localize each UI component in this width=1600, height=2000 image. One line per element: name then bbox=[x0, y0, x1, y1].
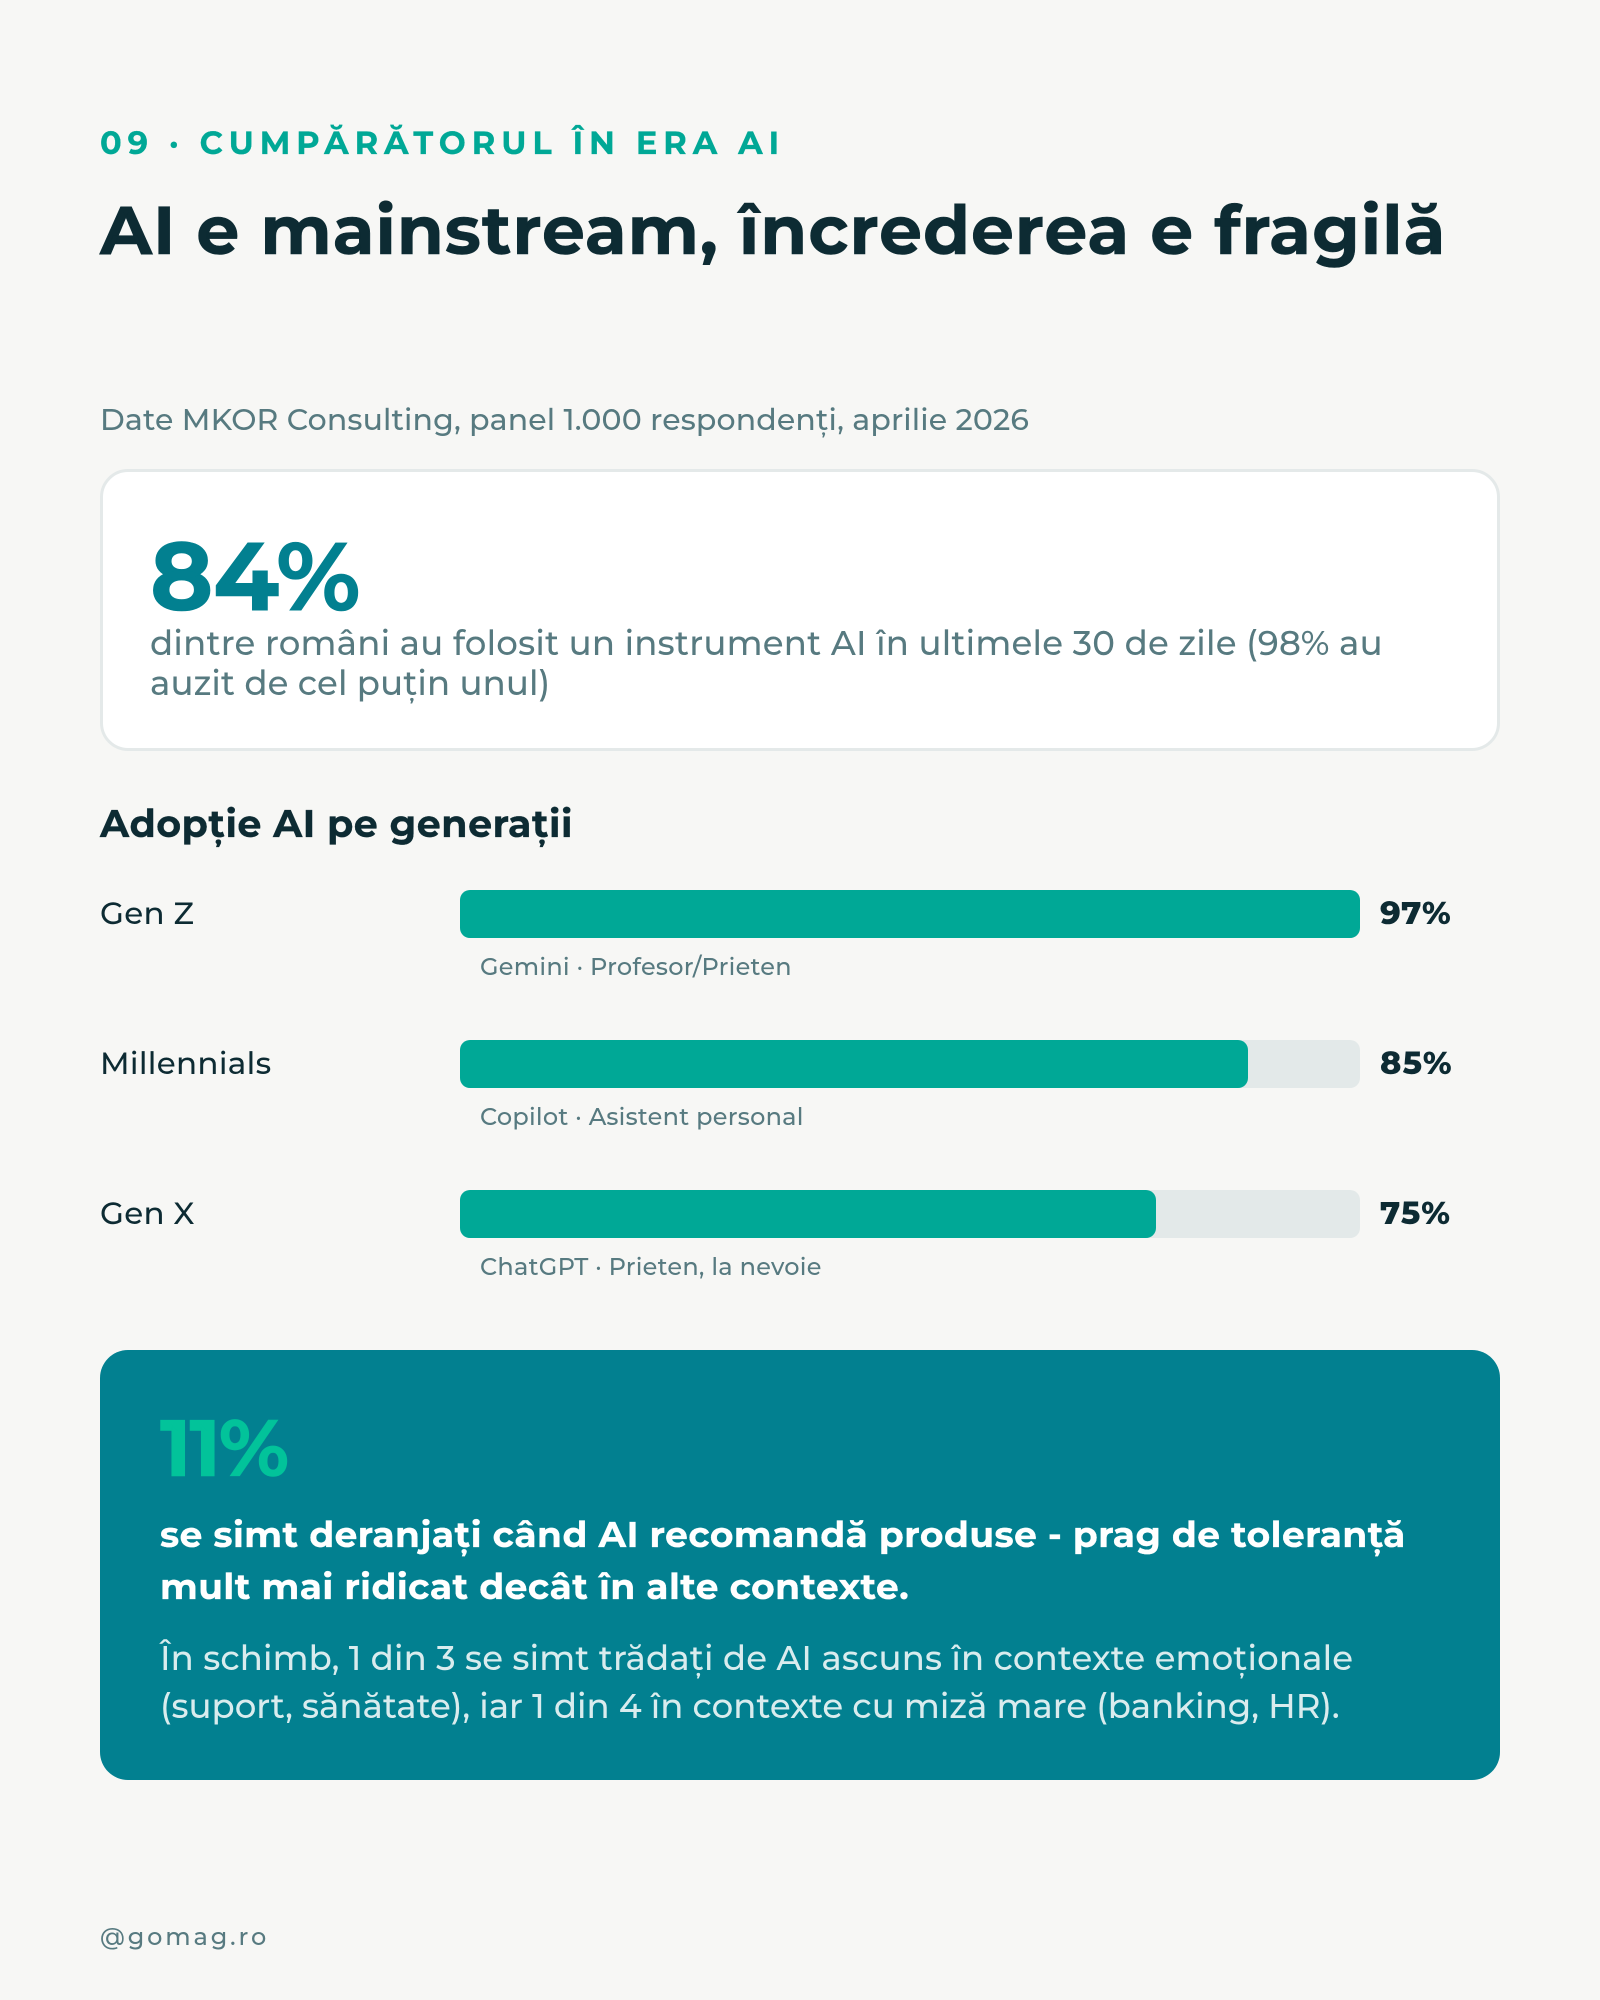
callout supporting text bbox=[159, 1637, 1353, 1727]
callout bold text: se simt deranjați când AI recomandă produse - prag de toleranță bbox=[160, 1513, 1406, 1557]
row: Millennials bbox=[100, 1040, 1453, 1132]
row: Gen Z: 97% bbox=[1380, 894, 1451, 933]
panel: 11% callout bbox=[100, 1350, 1500, 1780]
kicker: 09 · CUMPĂRĂTORUL ÎN ERA AI bbox=[100, 124, 785, 163]
row: Millennials: 85% bbox=[1380, 1044, 1453, 1083]
stat description: dintre români au folosit un instrument AI în ultimele 30 de zile (98% au bbox=[150, 622, 1383, 664]
row: Gen Z: Gemini · Profesor/Prieten bbox=[480, 953, 792, 982]
bar chart: AI adoption by generation bbox=[100, 890, 1453, 1282]
big number 84%: 84% bbox=[150, 518, 360, 635]
big number 11%: 11% bbox=[160, 1400, 287, 1497]
callout supporting text: (suport, sănătate), iar 1 din 4 în contexte cu miză mare (banking, HR). bbox=[160, 1685, 1340, 1727]
row: Gen X bbox=[100, 1190, 1451, 1282]
row: Millennials: Copilot · Asistent personal bbox=[480, 1103, 804, 1132]
callout bold text bbox=[160, 1513, 1406, 1609]
callout bold text: mult mai ridicat decât în alte contexte. bbox=[160, 1565, 909, 1609]
callout supporting text: În schimb, 1 din 3 se simt trădați de AI ascuns în contexte emoționale bbox=[160, 1637, 1353, 1679]
panel: 84% stat card bbox=[100, 469, 1500, 751]
footer handle: @gomag.ro bbox=[100, 1923, 269, 1952]
stat description: auzit de cel puțin unul) bbox=[150, 662, 550, 704]
row: Gen Z: Gen Z bbox=[100, 894, 194, 932]
row: Millennials: Millennials bbox=[100, 1044, 271, 1082]
row: Gen X: 75% bbox=[1380, 1194, 1451, 1233]
title: AI e mainstream, încrederea e fragilă bbox=[100, 189, 1446, 272]
row: Gen X: Gen X bbox=[100, 1194, 195, 1232]
section heading: Adopție AI pe generații bbox=[100, 800, 573, 847]
stat description bbox=[150, 622, 1383, 704]
row: Gen X: ChatGPT · Prieten, la nevoie bbox=[480, 1253, 822, 1282]
row: Gen Z bbox=[100, 890, 1451, 982]
subtitle: Date MKOR Consulting, panel 1.000 respondenți, aprilie 2026 bbox=[100, 401, 1029, 438]
